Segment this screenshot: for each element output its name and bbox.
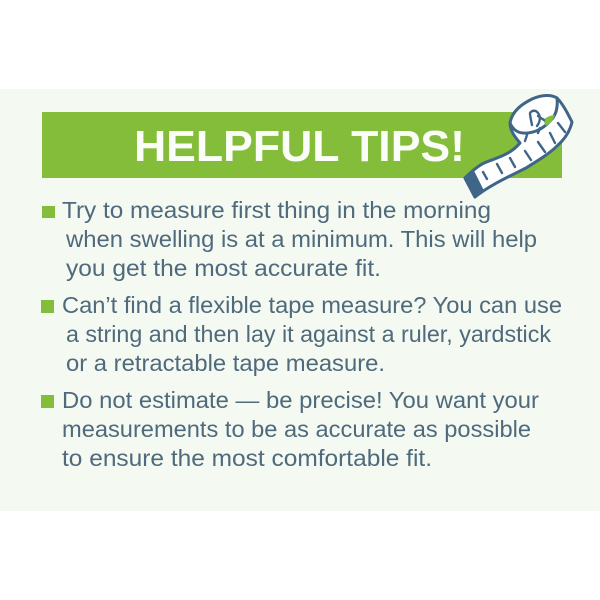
tip 2 text: [62, 292, 562, 376]
tip 3 text: [62, 387, 539, 471]
tip 1: [42, 197, 537, 281]
tip 1 text: Try to measure first thing in the morning: [62, 197, 491, 223]
tip 2: [41, 292, 562, 376]
bullet: [42, 206, 55, 218]
tip 1 text: you get the most accurate fit.: [66, 255, 381, 281]
tip 3: [41, 387, 539, 471]
tip 3 text: measurements to be as accurate as possible: [62, 416, 531, 442]
tape hook: [530, 111, 544, 126]
bullet: [41, 300, 54, 313]
tip 1 text: when swelling is at a minimum. This will help: [65, 226, 537, 252]
tape green fold: [543, 115, 555, 126]
tip 3 text: to ensure the most comfortable fit.: [62, 445, 432, 471]
icon: measuring tape: [465, 95, 572, 197]
tip 1 text: [62, 197, 537, 281]
tip 2 text: Can’t find a flexible tape measure? You can use: [62, 292, 562, 318]
tape loop inner edge: [510, 98, 557, 133]
tape end cap: [465, 172, 482, 197]
title: HELPFUL TIPS!: [134, 122, 465, 171]
tip 2 text: or a retractable tape measure.: [66, 350, 385, 376]
title banner: [42, 112, 562, 178]
panel: tips background: [0, 89, 600, 511]
tip 2 text: a string and then lay it against a ruler, yardstick: [66, 321, 552, 347]
tip 3 text: Do not estimate — be precise! You want your: [62, 387, 539, 413]
bullet: [41, 395, 54, 408]
tape ticks: [483, 123, 565, 179]
